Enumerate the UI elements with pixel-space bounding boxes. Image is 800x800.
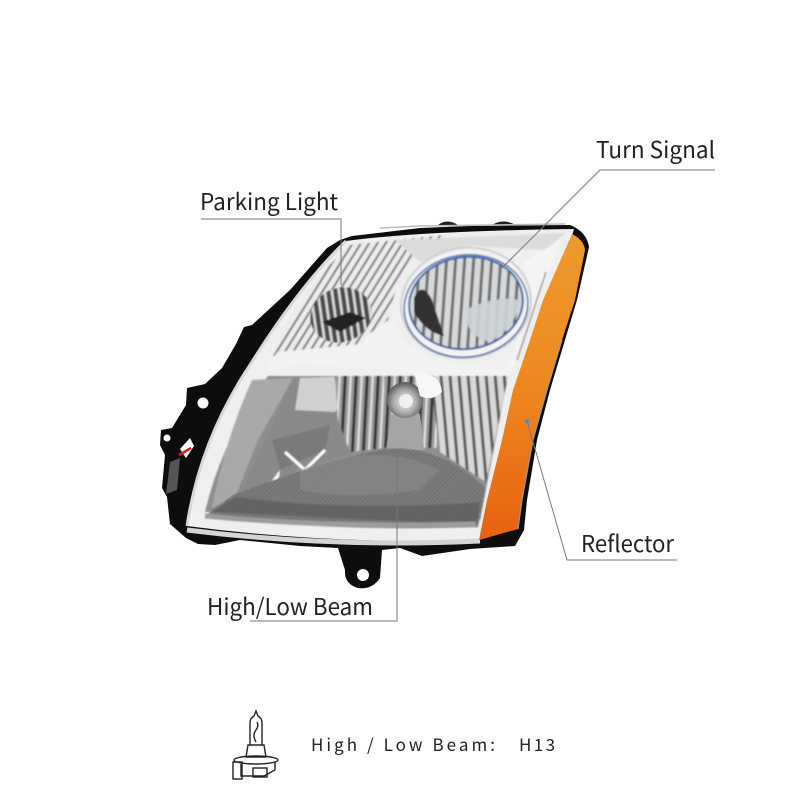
- low beam lens dome: [205, 448, 485, 528]
- parking light: [303, 279, 379, 351]
- upper reflector stripes: [265, 233, 566, 378]
- callout: turn signal: Turn Signal: [596, 131, 715, 165]
- lower reflector chamber: [205, 376, 508, 520]
- callout: high/low beam: High/Low Beam: [207, 588, 373, 622]
- callout: parking light: Parking Light: [200, 183, 338, 217]
- bulb specification text: H13: [519, 731, 555, 756]
- callout: reflector: [527, 421, 677, 560]
- lens body: [187, 229, 574, 543]
- callout: high/low beam: [207, 450, 397, 622]
- amber side marker: [479, 234, 585, 540]
- turn signal projector: [394, 239, 538, 367]
- callout: turn signal: [502, 131, 715, 268]
- bulb: [386, 372, 442, 450]
- headlight housing: [160, 222, 589, 588]
- icon: H13 bulb: [233, 711, 278, 779]
- bulb specification text: High / Low Beam:: [311, 731, 495, 756]
- callout: reflector: Reflector: [581, 525, 674, 559]
- callout: parking light: [200, 183, 341, 285]
